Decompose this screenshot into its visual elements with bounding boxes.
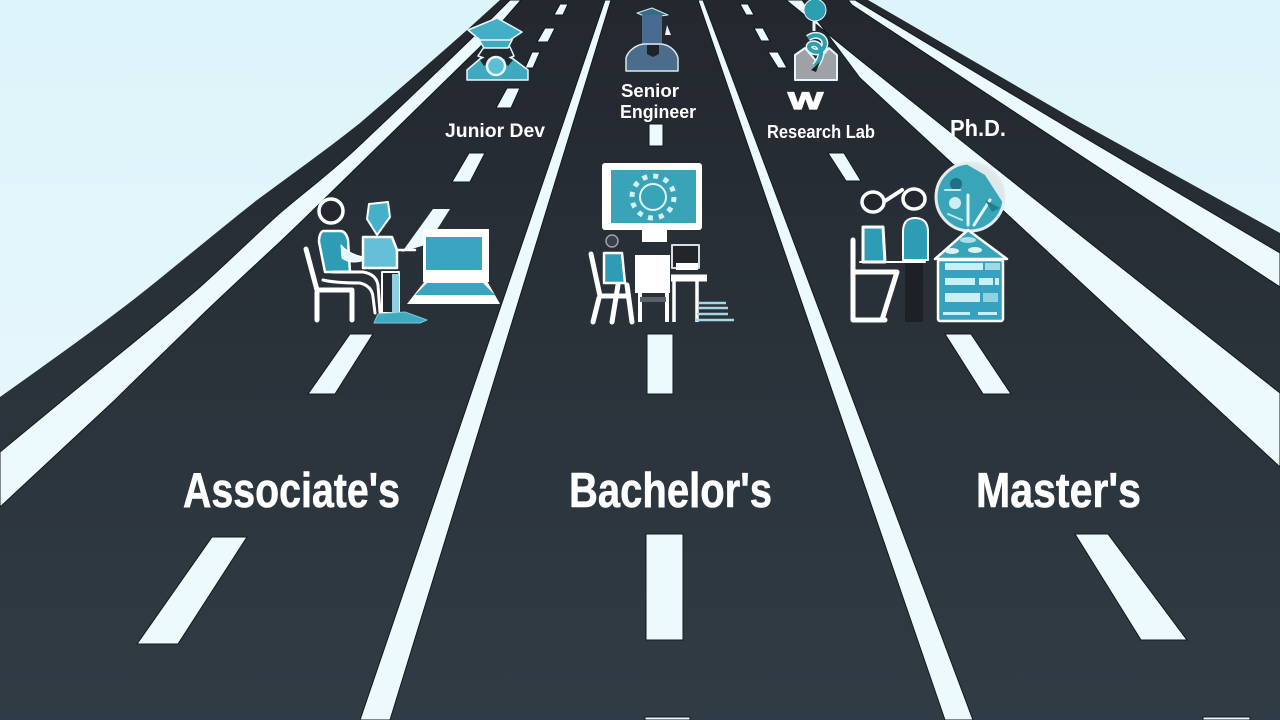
person two bbox=[363, 202, 427, 323]
monitor bbox=[602, 163, 702, 242]
right lane dashes bbox=[740, 4, 1250, 720]
centre lane dashes bbox=[645, 124, 690, 720]
person one bbox=[306, 199, 380, 320]
data house bbox=[935, 230, 1007, 321]
stack of books bbox=[696, 303, 734, 320]
right inner shoulder stripe bbox=[786, 0, 1280, 467]
small computer bbox=[671, 245, 707, 322]
icon: engineer bbox=[626, 8, 678, 71]
label: Senior Engineer: Engineer bbox=[620, 102, 696, 122]
icon: master's researchers and globe house bbox=[853, 163, 1007, 322]
right outer shoulder stripe bbox=[848, 0, 1280, 287]
desk bbox=[635, 255, 670, 322]
heading: Bachelor's: Bachelor's bbox=[569, 464, 772, 518]
icon: research flask bbox=[795, 0, 837, 80]
left shoulder stripe bbox=[0, 0, 521, 507]
heading: Master's: Master's bbox=[976, 464, 1141, 518]
seated person bbox=[591, 235, 632, 322]
icon: associate's students and laptop bbox=[306, 199, 500, 323]
researchers bbox=[853, 189, 928, 322]
dash behind laptop bbox=[402, 209, 450, 252]
icon: graduate bbox=[467, 18, 528, 80]
label: Ph.D.: Ph.D. bbox=[950, 115, 1006, 141]
heading: Associate's: Associate's bbox=[183, 464, 400, 518]
label: Research Lab: Research Lab bbox=[767, 122, 875, 142]
left lane dashes bbox=[137, 4, 568, 644]
laptop bbox=[407, 229, 500, 304]
left lane divider bbox=[360, 0, 611, 720]
globe bbox=[936, 163, 1004, 231]
right lane divider bbox=[698, 0, 973, 720]
label: Senior Engineer: Senior bbox=[621, 81, 679, 101]
label: Junior Dev: Junior Dev bbox=[445, 121, 545, 142]
icon: W sign: W bbox=[788, 88, 824, 115]
icon: bachelor's workstation bbox=[591, 163, 734, 322]
